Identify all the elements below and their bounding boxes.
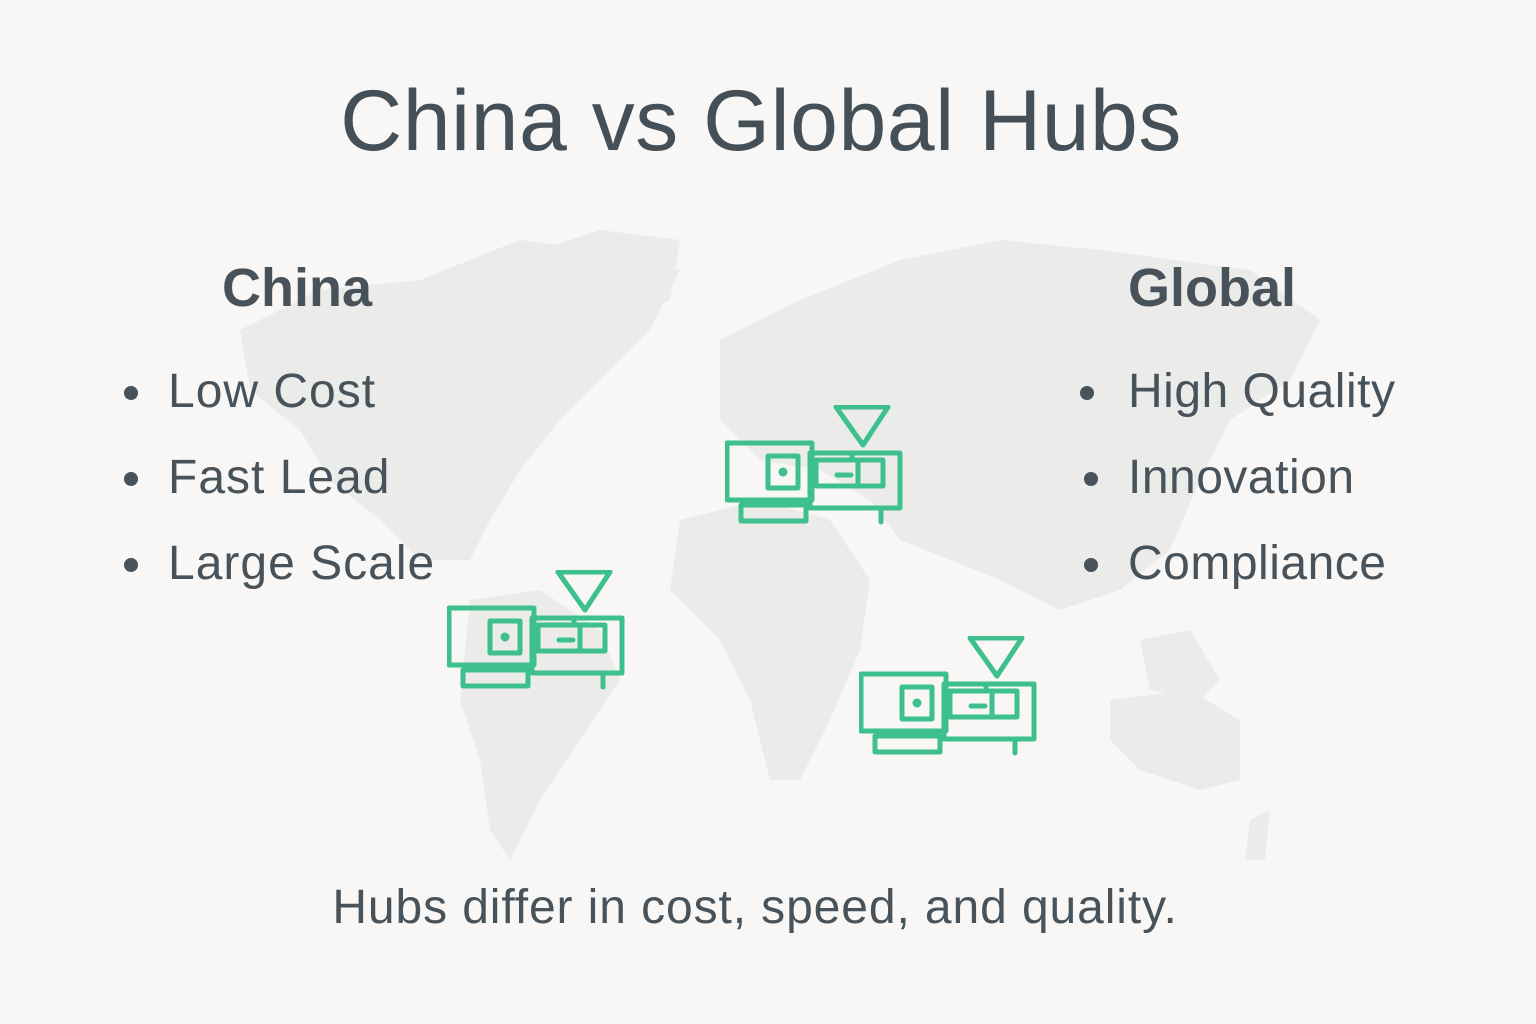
bullet list: global: Compliance (1128, 537, 1386, 590)
panel: china (124, 258, 435, 590)
bullet list: global: Innovation (1128, 451, 1355, 504)
icon: machine americas (447, 570, 624, 690)
title: China vs Global Hubs (340, 73, 1182, 169)
bullet list: global: High Quality (1128, 365, 1395, 418)
icon: machine europe (725, 405, 902, 524)
bullet list: china: Large Scale (168, 537, 435, 590)
icon: machine asia (859, 636, 1036, 756)
heading: global: Global (1128, 258, 1296, 318)
panel: global (1080, 258, 1395, 590)
caption: Hubs differ in cost, speed, and quality. (332, 881, 1178, 934)
bullet list: global (1080, 365, 1395, 590)
bullet list: china (124, 365, 435, 590)
heading: china: China (222, 258, 372, 318)
bullet list: china: Low Cost (168, 365, 376, 418)
bullet list: china: Fast Lead (168, 451, 390, 504)
